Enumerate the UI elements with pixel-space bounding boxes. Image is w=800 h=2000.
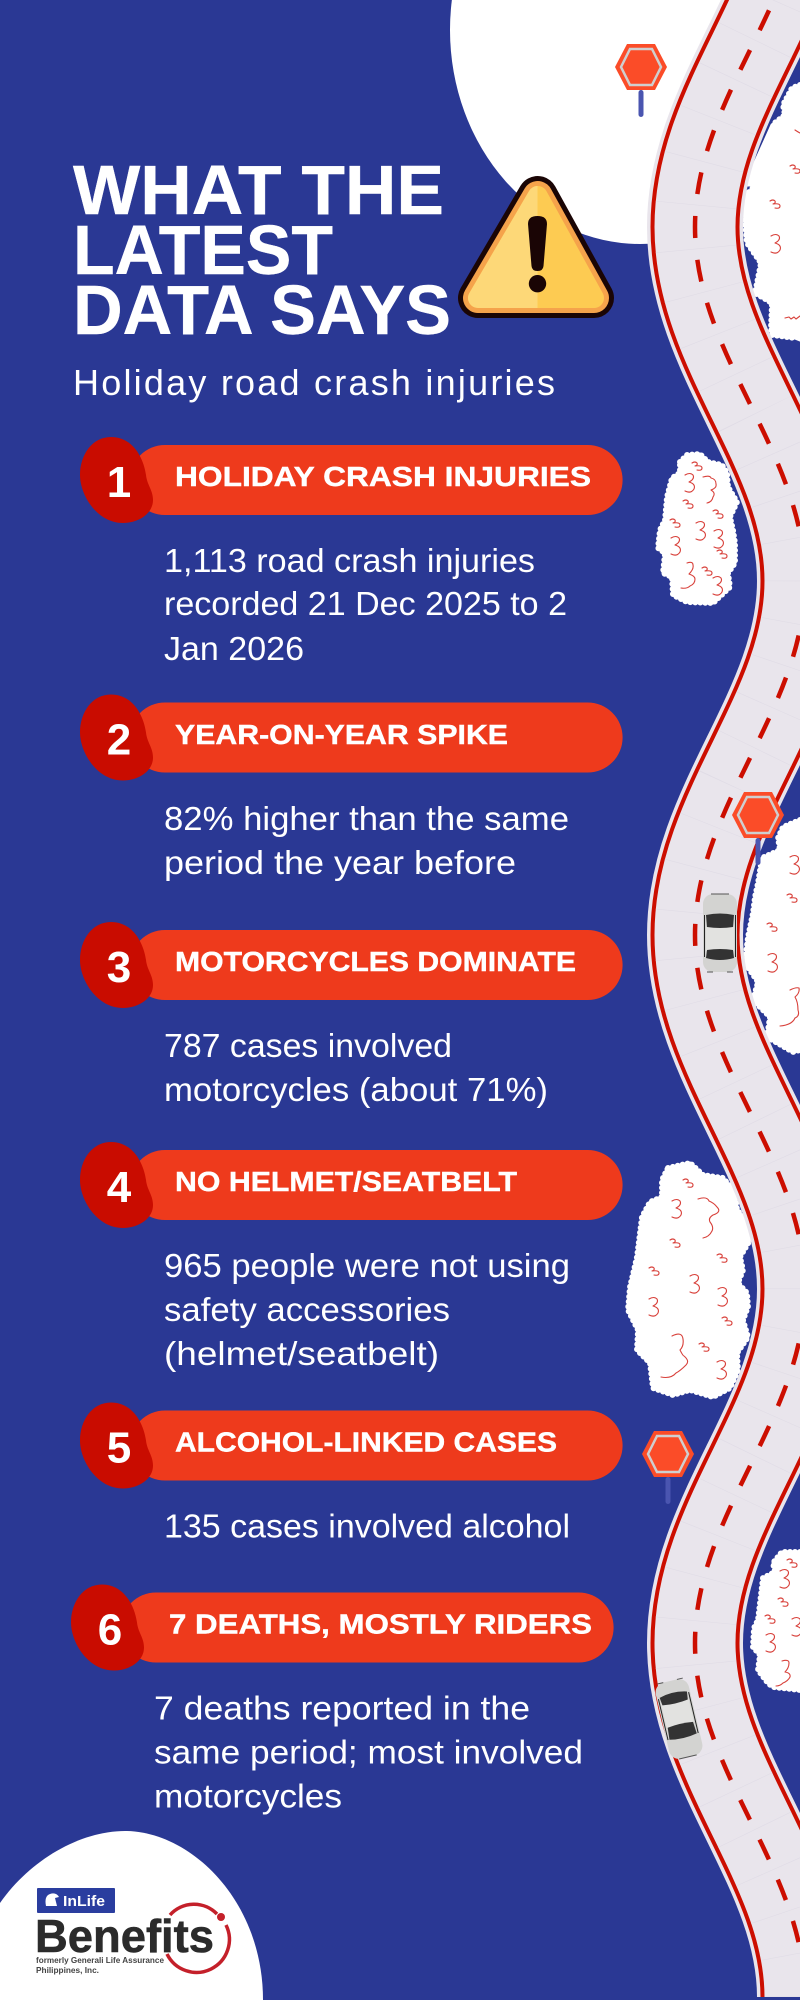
tree: bottom right (753, 1552, 800, 1690)
item 3 text: 787 cases involved (164, 1027, 452, 1064)
tree: top right (744, 85, 800, 340)
logo: small print: formerly Generali Life Assurance (36, 1955, 164, 1965)
item 1: HOLIDAY CRASH INJURIES (175, 461, 591, 492)
item 2 (80, 694, 623, 881)
item 2 text (164, 800, 569, 881)
car: lower (654, 1677, 704, 1761)
item 4: NO HELMET/SEATBELT (175, 1166, 517, 1197)
item 3 text (164, 1027, 548, 1108)
item 5: 5 (107, 1424, 131, 1472)
logo panel (0, 1831, 263, 2000)
title (73, 151, 451, 349)
title: WHAT THE (73, 151, 444, 229)
logo: small print: Philippines, Inc. (36, 1965, 99, 1975)
logo: InLife badge (37, 1888, 115, 1913)
title: DATA SAYS (73, 271, 451, 349)
item 3 (80, 922, 623, 1108)
item 5: ALCOHOL-LINKED CASES (175, 1426, 557, 1458)
car: upper (703, 894, 737, 972)
item 4 text: 965 people were not using (164, 1247, 570, 1284)
item 6 text: 7 deaths reported in the (154, 1690, 530, 1726)
item 2 text: 82% higher than the same (164, 800, 569, 837)
item 5 (80, 1402, 623, 1544)
item 4 text: (helmet/seatbelt) (164, 1335, 439, 1372)
item 1 text: Jan 2026 (164, 630, 304, 667)
item 6: 6 (98, 1606, 122, 1654)
item 3: 3 (107, 943, 131, 992)
item 2: YEAR-ON-YEAR SPIKE (175, 719, 508, 750)
logo: InLife badge: InLife (63, 1893, 105, 1910)
sign: top (615, 44, 667, 117)
item 1 text: recorded 21 Dec 2025 to 2 (164, 585, 567, 622)
item 6 text: motorcycles (154, 1778, 342, 1814)
sign: lower (642, 1431, 694, 1504)
item 6 (71, 1584, 614, 1814)
item 2: 2 (107, 716, 131, 764)
item 1 (80, 437, 623, 667)
item 1 text (164, 542, 567, 667)
logo: wordmark: Benefits (35, 1910, 214, 1962)
item 6: 7 DEATHS, MOSTLY RIDERS (169, 1608, 592, 1640)
road (695, 0, 800, 2000)
title: LATEST (73, 211, 333, 289)
tree: lower middle (628, 1163, 750, 1397)
subtitle: Holiday road crash injuries (73, 362, 555, 403)
logo: small print (36, 1955, 164, 1975)
item 2 text: period the year before (164, 844, 516, 881)
item 4: 4 (107, 1163, 132, 1212)
tree: right middle (745, 820, 800, 1052)
logo: red ring (167, 1904, 229, 1972)
item 1 text: 1,113 road crash injuries (164, 542, 535, 579)
item 6 text (154, 1690, 583, 1814)
icon: warning triangle (478, 196, 594, 298)
item 6 text: same period; most involved (154, 1734, 583, 1770)
item 3 text: motorcycles (about 71%) (164, 1071, 548, 1108)
item 5 text: 135 cases involved alcohol (164, 1508, 570, 1544)
item 4 text (164, 1247, 570, 1372)
sign: middle (732, 792, 784, 865)
item 3: MOTORCYCLES DOMINATE (175, 946, 576, 977)
logo (35, 1888, 229, 1975)
item 4 (80, 1142, 623, 1372)
tree: upper middle (658, 454, 737, 603)
item 4 text: safety accessories (164, 1291, 450, 1328)
white circle behind sign (450, 0, 721, 244)
item 1: 1 (107, 458, 131, 507)
